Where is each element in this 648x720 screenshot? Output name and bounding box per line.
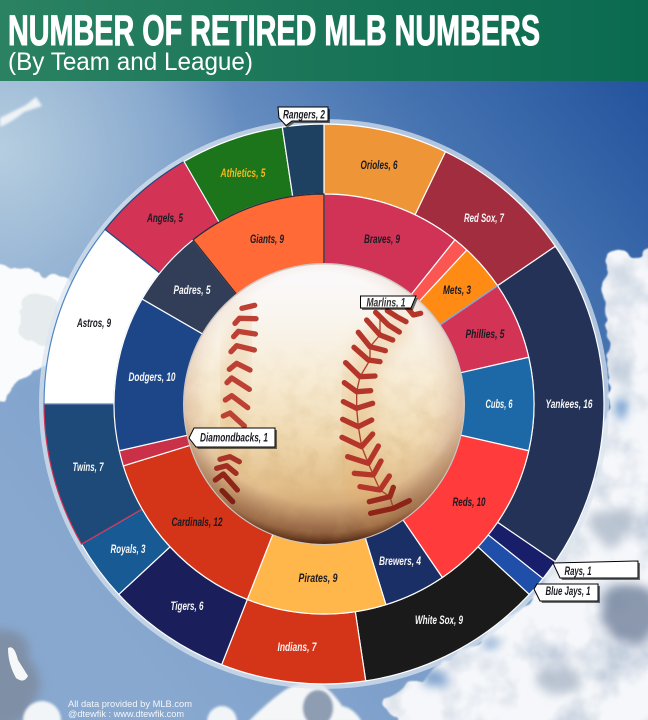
wedge: Reds [403, 435, 529, 578]
wedge: Mets [419, 250, 498, 325]
subtitle: (By Team and League) [8, 48, 253, 76]
label: Royals: Royals, 3 [110, 542, 146, 556]
wedge: Cardinals [123, 445, 273, 599]
label: Red Sox: Red Sox, 7 [464, 211, 505, 225]
label: Tigers: Tigers, 6 [170, 599, 204, 613]
callout: Diamondbacks [189, 428, 277, 449]
seam glow: right [356, 318, 404, 520]
halo ring around chart [42, 122, 606, 686]
label: Braves: Braves, 9 [364, 232, 400, 246]
cloud shading: right and lower right [422, 363, 648, 692]
callout: Blue Jays: Blue Jays, 1 [546, 584, 591, 598]
label: Cubs: Cubs, 6 [486, 397, 513, 411]
cloud: upper-left wisp [0, 97, 42, 127]
label: Angels: Angels, 5 [146, 211, 183, 225]
callout: Marlins: Marlins, 1 [366, 296, 406, 310]
wedge: Marlins [411, 240, 467, 301]
wedge: White Sox [355, 547, 529, 681]
label: Dodgers: Dodgers, 10 [128, 370, 176, 384]
label: Indians: Indians, 7 [278, 640, 317, 654]
callout: Rays [553, 561, 640, 580]
wedge: Rays [488, 522, 555, 579]
wedge: Rangers [282, 124, 324, 196]
wedge: Orioles [324, 124, 445, 215]
credits [68, 699, 192, 720]
label: Reds: Reds, 10 [452, 495, 486, 509]
wedge: Brewers [365, 520, 442, 605]
cloud: right and lower right [385, 250, 648, 720]
seam glow: left [226, 310, 246, 500]
label: Phillies: Phillies, 5 [466, 327, 505, 341]
wedge: Indians [222, 599, 366, 684]
credit: author: @dtewfik : www.dtewfik.com [68, 709, 184, 720]
cloud: left [0, 262, 72, 405]
baseball stitches: right seam [342, 307, 421, 513]
cloud: bottom left [0, 630, 61, 720]
wedge: Cubs [460, 357, 534, 451]
label: Twins: Twins, 7 [72, 460, 104, 474]
wedge: Athletics [184, 127, 293, 222]
baseball [183, 263, 465, 545]
label: Pirates: Pirates, 9 [298, 571, 338, 585]
baseball stitches: left seam [215, 305, 256, 502]
label: Orioles: Orioles, 6 [360, 158, 398, 172]
wedge: Phillies [440, 286, 529, 373]
credit: data source: All data provided by MLB.com [68, 699, 192, 710]
wedge: Pirates [247, 534, 386, 614]
wedge: Astros [44, 229, 160, 404]
callout: Diamondbacks: Diamondbacks, 1 [200, 430, 268, 444]
wedge: Giants [193, 194, 324, 295]
label: Cardinals: Cardinals, 12 [172, 515, 223, 529]
label: Giants: Giants, 9 [250, 232, 284, 246]
wedge: Blue Jays [478, 535, 543, 594]
wedge: Red Sox [415, 152, 555, 286]
wedge: Padres [142, 240, 237, 334]
wedge: Braves [324, 194, 455, 295]
callout: Rangers [278, 107, 330, 128]
callout: Blue Jays [534, 584, 600, 603]
wedge: Twins [44, 404, 142, 544]
callout: Rangers: Rangers, 2 [283, 108, 325, 122]
inner ring: National League [114, 194, 534, 614]
wedge: Dodgers [114, 299, 203, 451]
cloud: bottom centre [207, 683, 362, 720]
header banner [0, 0, 648, 81]
wedge: Tigers [119, 547, 247, 665]
callout: Rays: Rays, 1 [564, 564, 592, 578]
boundary line: Mets and Phillies [440, 286, 498, 325]
label: Astros: Astros, 9 [76, 316, 111, 330]
label: Mets: Mets, 3 [443, 283, 471, 297]
data labels on wedges [72, 158, 593, 654]
wedge: Royals [82, 509, 170, 594]
label: Padres: Padres, 5 [174, 283, 211, 297]
wedge: Angels [105, 162, 219, 273]
outer ring: American League [44, 124, 604, 684]
wedge: Yankees [498, 246, 604, 562]
wedge: Diamondbacks [119, 435, 190, 466]
label: Athletics: Athletics, 5 [220, 166, 266, 180]
label: Yankees: Yankees, 16 [546, 397, 593, 411]
label: Brewers: Brewers, 4 [379, 554, 421, 568]
label: White Sox: White Sox, 9 [415, 613, 463, 627]
